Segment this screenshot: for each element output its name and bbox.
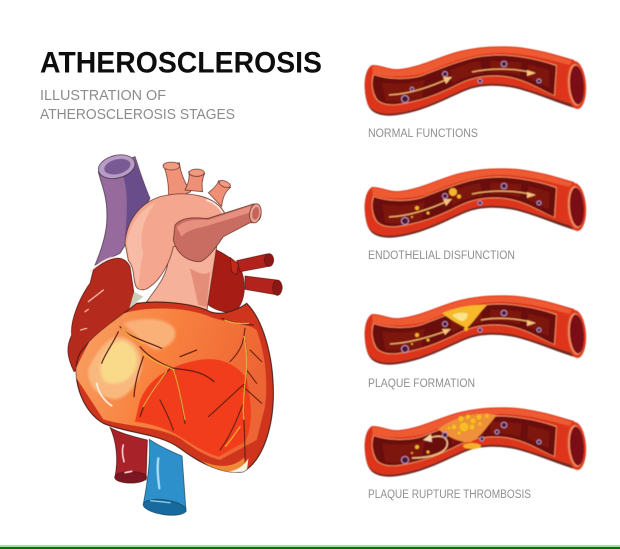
coronary arteries <box>102 318 262 460</box>
blood cells <box>402 183 541 224</box>
lipid droplets <box>411 188 461 218</box>
ascending aorta base <box>147 240 217 312</box>
ventricle body <box>73 302 273 473</box>
ventricle deep red region <box>135 359 251 457</box>
inferior vena cava (blue) <box>142 439 187 518</box>
vessel: endothelial disfunction <box>365 168 588 238</box>
pulmonary trunk <box>173 203 263 262</box>
pulmonary veins (right side) <box>207 250 282 313</box>
vessel: normal functions <box>365 46 588 116</box>
gap under atrium <box>128 292 143 312</box>
flow arrows <box>389 191 534 217</box>
subtitle: ATHEROSCLEROSIS STAGES <box>40 106 235 123</box>
plaque <box>442 305 487 328</box>
label: plaque formation: PLAQUE FORMATION <box>368 378 475 390</box>
plaque cluster <box>438 414 497 442</box>
flow arrows <box>389 69 534 95</box>
title: ATHEROSCLEROSIS <box>40 46 322 80</box>
aortic arch branches <box>163 162 231 207</box>
blood cells <box>402 61 541 102</box>
lipid droplets <box>411 445 430 454</box>
heart illustration <box>68 151 282 518</box>
subtitle: ILLUSTRATION OF <box>40 87 166 104</box>
aortic arch <box>125 194 226 290</box>
thrombus <box>463 443 481 449</box>
label: plaque rupture thrombosis: PLAQUE RUPTURE THROMBOSIS <box>368 489 531 501</box>
label: normal functions: NORMAL FUNCTIONS <box>368 128 478 140</box>
right atrium <box>68 258 135 372</box>
subtitle <box>40 87 235 123</box>
blood cells <box>402 310 541 352</box>
lipid droplets <box>411 327 468 345</box>
curved flow arrow <box>412 436 447 458</box>
vessel: plaque rupture thrombosis <box>365 407 588 477</box>
ventricle highlight <box>88 337 142 399</box>
inferior vessel (red) <box>110 427 147 483</box>
vessel: plaque formation <box>365 295 588 365</box>
bottom green bar <box>0 545 620 549</box>
blood cells <box>402 422 541 464</box>
label: endothelial disfunction: ENDOTHELIAL DISFUNCTION <box>368 250 515 262</box>
lower right rim <box>200 457 245 472</box>
superior vena cava (purple) <box>95 151 150 265</box>
ventricle top band <box>73 309 266 460</box>
flow arrows <box>390 318 534 344</box>
